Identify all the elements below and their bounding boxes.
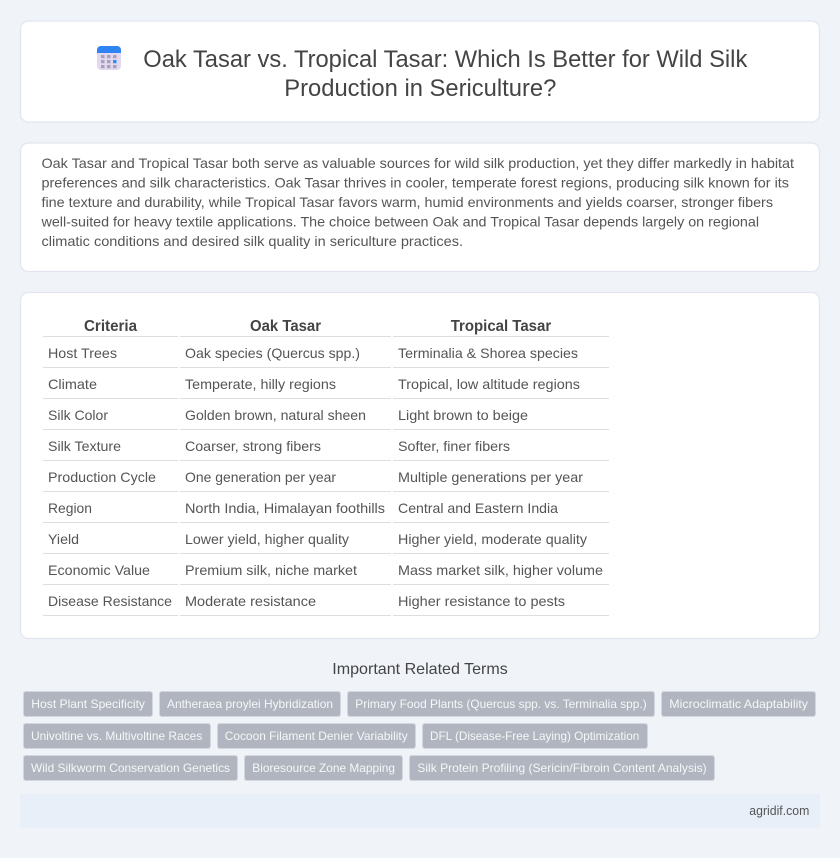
panel: title [20,21,820,122]
row: production cycle [48,469,583,485]
row: host trees: Terminalia & Shorea species [398,345,578,361]
text block: description: Oak Tasar and Tropical Tasar both serve as valuable sources for wild silk production, yet they differ markedly in habitat [42,155,794,171]
text block: description [40,155,794,249]
tag list: related terms [24,692,816,780]
tag list: related terms: Wild Silkworm Conservation Genetics [31,761,230,775]
row: silk color: Light brown to beige [398,407,528,423]
tag list: related terms: Silk Protein Profiling (Sericin/Fibroin Content Analysis) [417,761,707,775]
tag list: related terms: Cocoon Filament Denier Variability [225,729,408,743]
tag list: related terms: Univoltine vs. Multivoltine Races [31,729,202,743]
text block: description: preferences and silk characteristics. Oak Tasar thrives in cooler, temperate forest regions, producing silk known for its [42,174,789,190]
row: climate: Temperate, hilly regions [185,376,336,392]
tag list: related terms: Bioresource Zone Mapping [252,761,395,775]
row: silk color: Silk Color [48,407,108,423]
row: economic value: Economic Value [48,562,150,578]
footer: agridif.com [749,804,809,818]
row: climate: Climate [48,376,97,392]
row: production cycle: Production Cycle [48,469,156,485]
row: climate [48,376,580,392]
table header row [84,318,551,335]
tag list: related terms: Primary Food Plants (Quercus spp. vs. Terminalia spp.) [355,697,647,711]
table header row: Criteria [84,318,137,335]
row: silk texture: Softer, finer fibers [398,438,510,454]
text block: description: well-suited for heavy textile applications. The choice between Oak and Tropical Tasar depends largely on regional [40,214,759,230]
heading: related terms: Important Related Terms [332,661,508,678]
row: disease resistance [48,593,565,609]
row: silk texture: Silk Texture [48,438,121,454]
row: economic value [48,562,603,578]
row: yield: Yield [48,531,79,547]
row: silk texture [48,438,510,454]
heading: Oak Tasar vs. Tropical Tasar: Which Is Better for Wild Silk [143,46,748,73]
row: region: Central and Eastern India [398,500,558,516]
tag list: related terms: DFL (Disease-Free Laying) Optimization [430,729,639,743]
row: region: Region [48,500,92,516]
row: economic value: Premium silk, niche market [185,562,357,578]
row: economic value: Mass market silk, higher volume [398,562,603,578]
heading: Production in Sericulture? [284,75,556,102]
tag list: related terms: Host Plant Specificity [31,697,145,711]
table header row: Tropical Tasar [451,318,551,335]
row: yield: Lower yield, higher quality [185,531,349,547]
text block: description: fine texture and durability, while Tropical Tasar favors warm, humid environments and yields coarser, stronger fibers [42,194,773,210]
row: host trees: Oak species (Quercus spp.) [185,345,360,361]
row: silk color [48,407,528,423]
icon: calendar [97,46,121,70]
row: host trees: Host Trees [48,345,117,361]
footer [20,794,820,828]
row: yield [48,531,587,547]
tag list: related terms: Antheraea proylei Hybridization [167,697,333,711]
panel: description [20,143,820,272]
table header row: Oak Tasar [250,318,321,335]
row: disease resistance: Higher resistance to pests [398,593,565,609]
panel: comparison table [20,292,820,638]
row: disease resistance: Disease Resistance [48,593,172,609]
heading [143,46,748,102]
row: host trees [48,345,578,361]
row: climate: Tropical, low altitude regions [398,376,580,392]
row: disease resistance: Moderate resistance [185,593,316,609]
row: silk texture: Coarser, strong fibers [185,438,321,454]
row: region [48,500,558,516]
tag list: related terms: Microclimatic Adaptability [669,697,808,711]
row: yield: Higher yield, moderate quality [398,531,587,547]
text block: description: climatic conditions and desired silk quality in sericulture practices. [42,233,463,249]
row: production cycle: One generation per year [185,469,336,485]
row: production cycle: Multiple generations per year [398,469,583,485]
row: region: North India, Himalayan foothills [185,500,385,516]
row: silk color: Golden brown, natural sheen [185,407,366,423]
